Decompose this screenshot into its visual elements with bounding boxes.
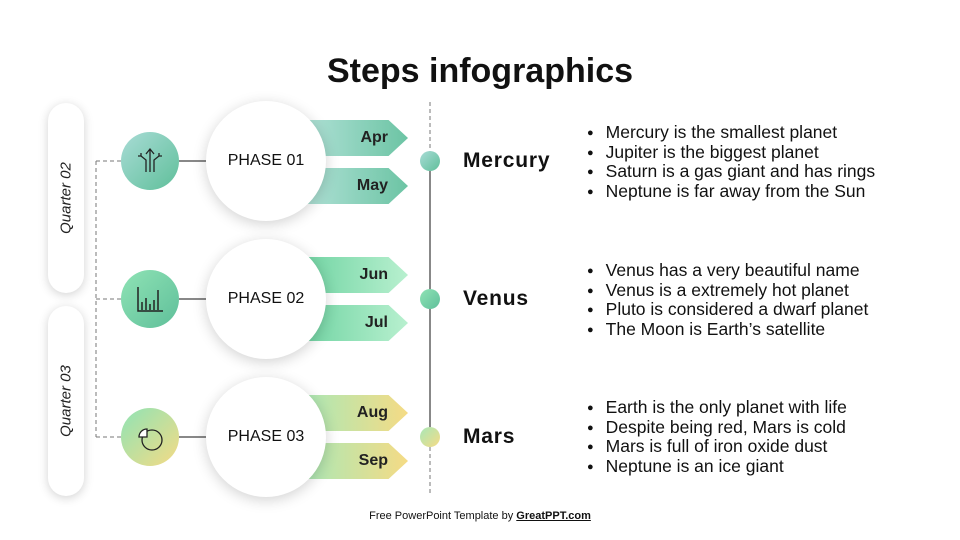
pill: Quarter 03 [48,306,84,496]
pill: Quarter 03: Quarter 03 [58,365,74,437]
list: Mars: Earth is the only planet with life [606,397,847,417]
list: Venus: Venus is a extremely hot planet [606,280,849,300]
phase 01 circle [206,101,326,221]
arrow: Jun [300,257,408,293]
phase 03 circle: PHASE 03 [228,428,304,445]
arrow: May: May [357,177,388,194]
arrow: Jul: Jul [365,314,388,331]
arrow: Sep [300,443,408,479]
heading: Mars: Mars [463,425,515,448]
title: Steps infographics [327,52,633,90]
dot: Venus [420,289,440,309]
heading: Venus: Venus [463,287,529,310]
icon: chart [121,270,179,328]
list: Mars: Mars is full of iron oxide dust [606,436,827,456]
pill: Quarter 02: Quarter 02 [58,162,74,234]
list: Mercury: Neptune is far away from the Sun [606,180,865,200]
dot: Mars [420,427,440,447]
list: Mars [588,397,847,476]
list: Venus: Pluto is considered a dwarf planet [606,299,868,319]
arrow: Jul [300,305,408,341]
icon: arrows [121,132,179,190]
arrow: Apr: Apr [360,129,388,146]
list: Mars: Neptune is an ice giant [606,456,784,476]
list: Venus: The Moon is Earth’s satellite [606,318,825,338]
phase 01 circle: PHASE 01 [228,152,304,169]
dot: Mercury [420,151,440,171]
phase 02 circle: PHASE 02 [228,290,304,307]
list: Mars: Despite being red, Mars is cold [606,416,846,436]
arrow: Aug [300,395,408,431]
pill: Quarter 02 [48,103,84,293]
arrow: May [300,168,408,204]
phase 02 circle [206,239,326,359]
arrow: Sep: Sep [359,452,388,469]
arrow: Jun: Jun [360,266,388,283]
heading: Mercury: Mercury [463,149,550,172]
footer: Free PowerPoint Template by GreatPPT.com [369,510,591,522]
list: Mercury: Mercury is the smallest planet [606,122,837,142]
arrow: Apr [300,120,408,156]
arrow: Aug: Aug [357,404,388,421]
phase 03 circle [206,377,326,497]
icon: pie [121,408,179,466]
list: Venus: Venus has a very beautiful name [606,260,860,280]
list: Mercury [588,122,875,200]
list: Mercury: Jupiter is the biggest planet [606,142,819,162]
list: Venus [588,260,868,338]
list: Mercury: Saturn is a gas giant and has rings [606,161,875,181]
